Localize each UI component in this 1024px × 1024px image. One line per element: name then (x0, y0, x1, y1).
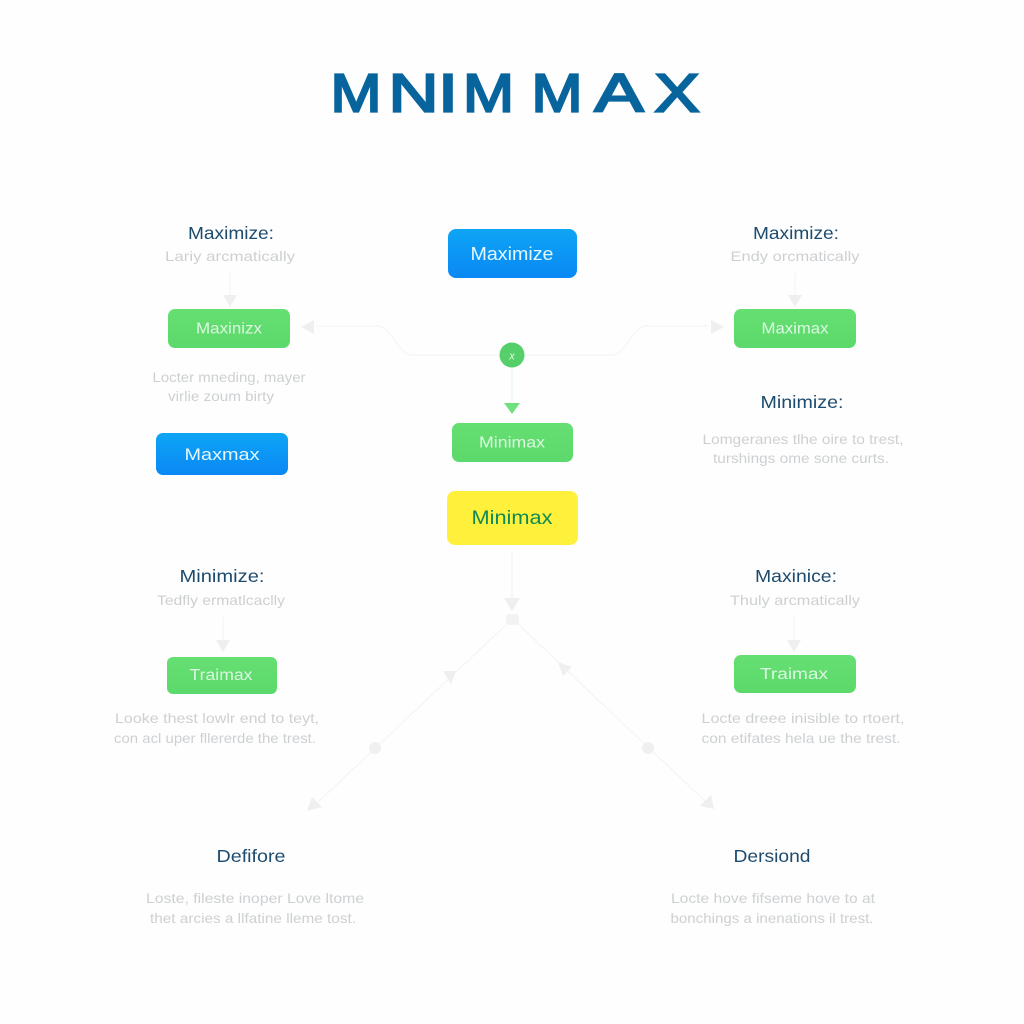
green box: traimax left (167, 657, 277, 694)
panel: center flow (301, 229, 724, 545)
title: N (388, 64, 438, 124)
arrow: down to traimax right (787, 617, 801, 652)
text block: lower left description: Looke thest lowlr end to teyt, (115, 710, 319, 726)
heading: maximize right: Maximize: (753, 223, 839, 243)
heading: deffore: Defifore (216, 846, 286, 866)
green box: maximizx (168, 309, 290, 348)
caption: lower right: Thuly arcmatically (730, 592, 860, 608)
heading: maxinice: Maxinice: (755, 566, 837, 586)
green box: maximax (734, 309, 856, 348)
title (330, 64, 700, 124)
panel: top left maximize (152, 223, 306, 475)
panel: lower right maximice (702, 566, 904, 746)
text block: lower left description (114, 710, 319, 746)
diagram: lower split arrows (307, 552, 714, 811)
title: M (532, 64, 582, 124)
heading: minimize lower left: Minimize: (180, 566, 264, 586)
title: M (463, 64, 514, 124)
arrow: down to green box left (223, 273, 237, 307)
title: X (654, 64, 700, 124)
text block: bottom left description: thet arcies a llfatine lleme tost. (150, 910, 356, 926)
yellow box: minimax (447, 491, 578, 545)
green box: traimax right (734, 655, 856, 693)
icon: green node (500, 342, 524, 368)
text block: left description: virlie zoum birty (168, 388, 274, 404)
text block: bottom left description: Loste, fileste inoper Love ltome (146, 890, 364, 906)
text block: right description: turshings ome sone curts. (713, 450, 889, 466)
text block: bottom right description: bonchings a inenations il trest. (670, 910, 874, 926)
title: A (594, 64, 644, 124)
yellow box: minimax: Minimax (472, 507, 553, 529)
arrow: down to green box right (788, 273, 802, 307)
heading: dersiond: Dersiond (734, 846, 810, 866)
connector: branches to left and right (301, 320, 724, 355)
panel: bottom right dersiond (670, 846, 875, 926)
caption: top left: Lariy arcmatically (165, 248, 295, 264)
text block: right description: Lomgeranes tlhe oire to trest, (702, 431, 904, 447)
heading: minimize right: Minimize: (760, 392, 844, 412)
text block: lower left description: con acl uper fllererde the trest. (114, 730, 316, 746)
text block: lower right description: con etifates hela ue the trest. (702, 730, 900, 746)
title: I (438, 64, 458, 124)
text block: left description: Locter mneding, mayer (152, 369, 306, 385)
panel: lower left minimize (114, 566, 319, 746)
text block: bottom left description (146, 890, 364, 926)
green box: maximax: Maximax (762, 320, 829, 338)
arrow: down to traimax left (216, 617, 230, 652)
title: M (330, 64, 382, 124)
caption: lower left: Tedfly ermatlcaclly (157, 592, 285, 608)
green box: maximizx: Maxinizx (196, 320, 262, 338)
text block: bottom right description (670, 890, 875, 926)
heading: maximize left: Maximize: (188, 223, 274, 243)
text block: left description (152, 369, 306, 404)
green box: traimax left: Traimax (190, 667, 253, 684)
caption: top right: Endy orcmatically (730, 248, 860, 264)
text block: bottom right description: Locte hove fifseme hove to at (671, 890, 875, 906)
text block: lower right description (702, 710, 904, 746)
blue box: maxmax: Maxmax (184, 445, 260, 464)
blue box: maxmax (156, 433, 288, 475)
text block: right description (702, 431, 904, 466)
panel: bottom left deffore (146, 846, 364, 926)
green box: minimax: Minimax (479, 434, 545, 452)
text block: lower right description: Locte dreee inisible to rtoert, (702, 710, 904, 726)
blue box: maximize: Maximize (470, 244, 554, 264)
blue box: maximize (448, 229, 577, 278)
green box: traimax right: Traimax (760, 666, 828, 683)
arrow: node to minimax (504, 368, 520, 414)
green box: minimax (452, 423, 573, 462)
icon: green node: x (508, 350, 515, 362)
panel: top right maximize (702, 223, 904, 466)
